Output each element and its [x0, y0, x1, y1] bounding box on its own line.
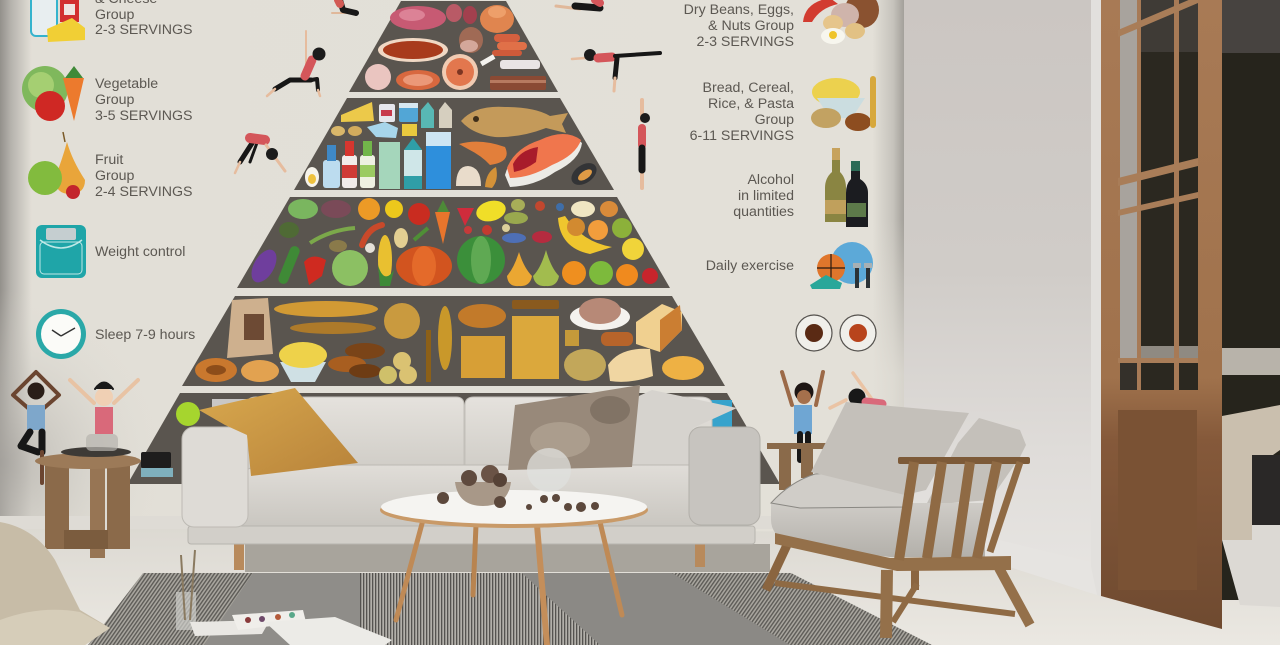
milk bottles and cartons — [305, 132, 451, 189]
label: fruit group: Fruit — [95, 152, 123, 168]
left column: vegetable group — [22, 66, 193, 124]
figure: tree pose — [13, 372, 59, 483]
floor — [0, 528, 1280, 645]
side table: right — [767, 443, 827, 490]
label: weight control: Weight control — [95, 244, 185, 260]
right arm — [689, 427, 760, 525]
back rail — [898, 457, 1030, 464]
bed in next room — [1222, 348, 1280, 607]
right column: bread group: Group — [755, 112, 794, 128]
figure: downward dog — [235, 137, 285, 173]
tier 5: sports and exercise — [128, 393, 780, 484]
left column: dairy group: Group — [95, 7, 135, 23]
right column: bread group: 6-11 SERVINGS — [690, 128, 794, 144]
icon: blue ball behind sofa — [704, 400, 732, 428]
right column: bread group — [690, 76, 876, 144]
right column: alcohol: in limited — [738, 188, 794, 204]
icon: milk and cheese — [31, 0, 85, 42]
figure: lunge with raised arm — [267, 31, 326, 96]
back pillow — [811, 402, 969, 495]
left column: dairy group: 2-3 SERVINGS — [95, 22, 193, 38]
figures: yoga poses around the pyramid — [13, 0, 882, 483]
icon: two cups of coffee and tea — [796, 315, 876, 351]
armchair — [766, 402, 1030, 638]
left column: fruit group: Group — [95, 168, 135, 184]
left column: vegetable group: 3-5 SERVINGS — [95, 108, 193, 124]
salmon steak — [505, 134, 582, 187]
label: sleep: Sleep 7-9 hours — [95, 327, 195, 343]
tier 3: vegetables and fruit — [237, 197, 670, 288]
right column: meat and beans group — [684, 0, 879, 50]
label: vegetable group: Vegetable — [95, 76, 158, 92]
glass vase — [527, 448, 571, 492]
icon: wine and liqueur bottles — [825, 148, 868, 227]
side table: left — [35, 434, 141, 558]
left column: sleep — [36, 309, 195, 359]
left arm — [182, 427, 248, 527]
figure: arms up behind chair — [782, 372, 823, 460]
seat base cushion — [771, 503, 985, 557]
throw blanket on stool — [0, 522, 110, 645]
icon: vegetables — [22, 66, 84, 121]
figure: warrior balance — [572, 49, 660, 91]
tier 2: milk, cheese and fish — [294, 98, 614, 190]
right column: bread group: Rice, & Pasta — [708, 96, 794, 112]
label: daily exercise: Daily exercise — [706, 258, 794, 274]
bowl of nuts — [455, 465, 511, 506]
second back cushion — [926, 418, 1026, 505]
background: left mural wall — [0, 0, 904, 535]
figure: seated top left — [332, 0, 356, 13]
background: door frame edge — [1091, 0, 1101, 596]
icon: clock — [36, 309, 86, 359]
right column: alcohol: quantities — [733, 204, 794, 220]
icon: tennis ball — [176, 402, 200, 426]
figure: side bend behind chair — [830, 373, 882, 408]
icon: bathroom scale — [36, 225, 86, 278]
right column: daily exercise — [706, 242, 873, 289]
icon: roller skate — [141, 452, 173, 477]
left column: fruit group — [28, 132, 193, 200]
right column: alcohol — [733, 148, 868, 227]
icon: fruit — [28, 132, 85, 199]
bread bag — [227, 298, 273, 358]
left column: fruit group: 2-4 SERVINGS — [95, 184, 193, 200]
tier 4: bread, cereal, rice and pasta — [182, 296, 725, 386]
coffee table — [380, 448, 648, 645]
left column: weight control — [36, 225, 185, 278]
jar of paint brushes — [176, 550, 196, 630]
icon: meat, beans and eggs — [803, 0, 879, 44]
sofa — [182, 385, 760, 570]
left column: vegetable group: Group — [95, 92, 135, 108]
tray and jars — [61, 434, 131, 457]
rug — [88, 573, 932, 645]
tier 1: meat, poultry and fish — [349, 1, 558, 92]
label: bread group: Bread, Cereal, — [703, 80, 794, 96]
baseboard: left wall — [0, 516, 904, 529]
baseboard: right wall — [903, 517, 1097, 595]
paint palette — [232, 610, 306, 630]
right column: meat and beans group: 2-3 SERVINGS — [696, 34, 794, 50]
scattered nuts — [437, 492, 599, 512]
bowl of rice — [279, 342, 327, 382]
background: lower left wall shading — [0, 290, 240, 530]
sofa floor shadow — [245, 544, 770, 572]
seat cushions — [232, 465, 716, 527]
figure: standing with arm up — [640, 100, 650, 188]
back slats — [899, 462, 1020, 560]
seat rail — [775, 533, 1011, 571]
orange cushion — [199, 388, 358, 476]
loose sheet of paper — [190, 620, 270, 636]
base rail — [188, 526, 755, 544]
background: lower right wall lightening — [868, 220, 904, 530]
right column: meat and beans group: & Nuts Group — [708, 18, 794, 34]
icon: exercise equipment — [810, 242, 873, 289]
icon: dumbbell — [212, 399, 252, 408]
lower door panel — [1118, 410, 1197, 590]
panel: food pyramid — [128, 1, 780, 484]
icon: bread and cereal — [811, 76, 876, 131]
door and next room — [1101, 0, 1280, 629]
figure: arms raised, pink top — [70, 380, 138, 434]
seat top cushion — [771, 473, 905, 508]
label: alcohol: Alcohol — [747, 172, 794, 188]
fur throw — [508, 385, 640, 470]
grey cushion — [630, 390, 737, 470]
background: right wall — [904, 0, 1104, 600]
label: meat and beans group: Dry Beans, Eggs, — [684, 2, 794, 18]
figure: seated top right — [556, 0, 600, 9]
open sketch book — [265, 617, 392, 645]
left column: dairy group — [31, 0, 193, 42]
